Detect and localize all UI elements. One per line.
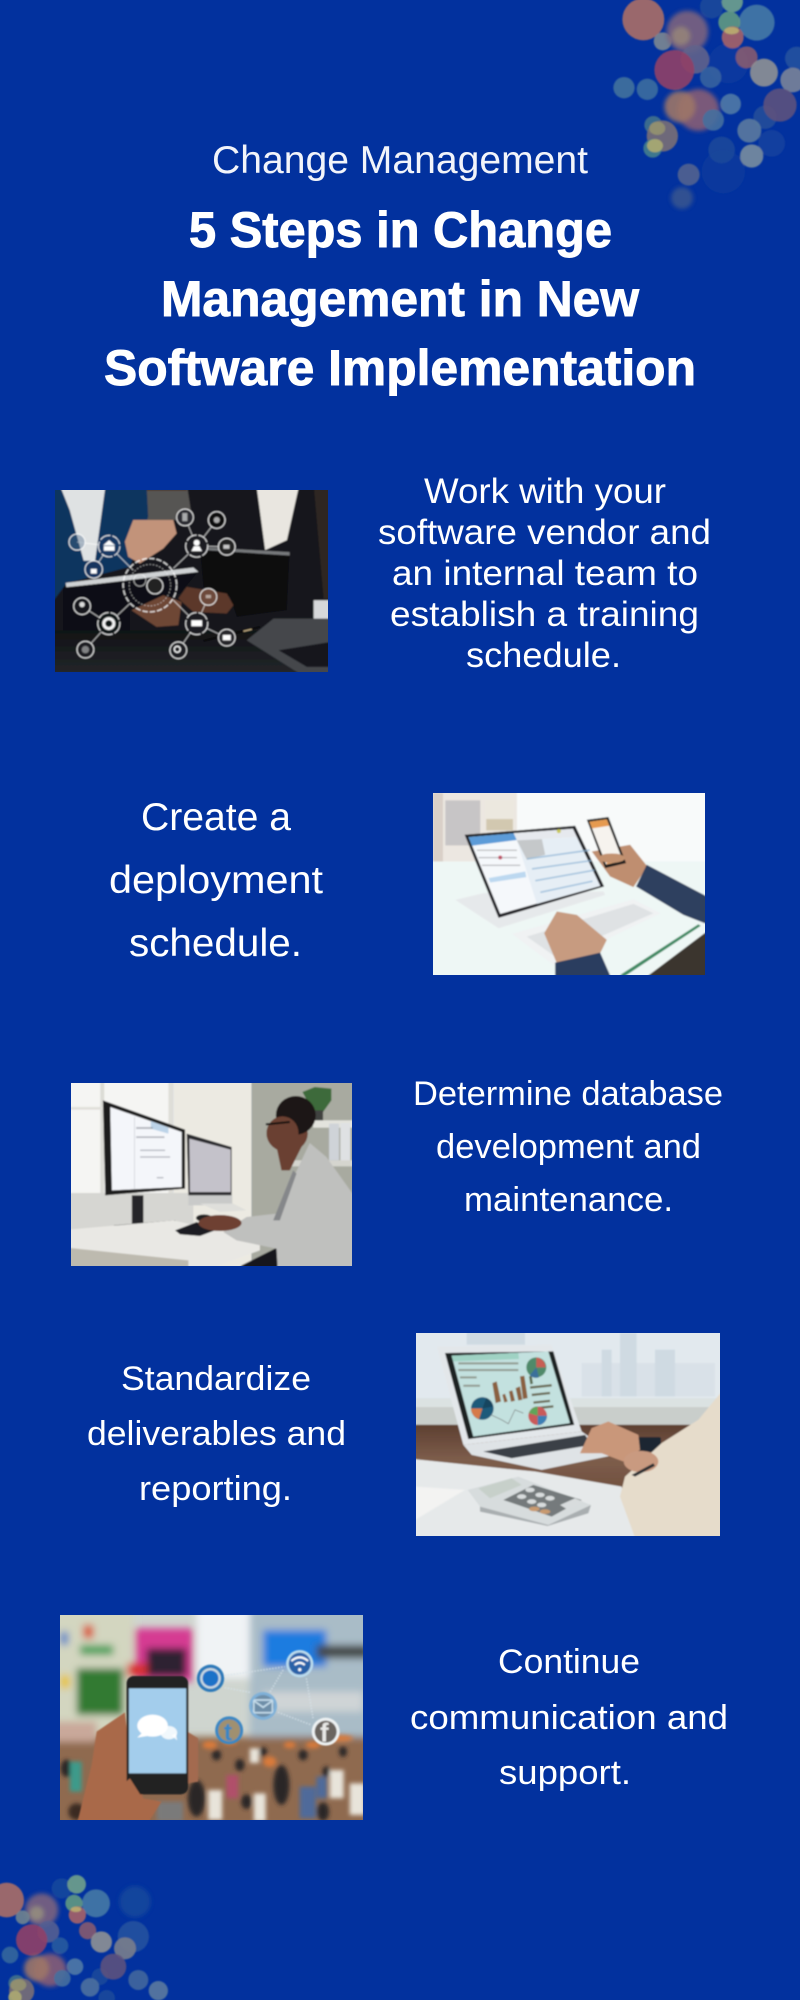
step 5 photo: smartphone with social icons over city crowd: f — [320, 1718, 329, 1748]
title: Software Implementation — [104, 340, 696, 396]
title — [104, 202, 696, 396]
step 2 text — [109, 796, 323, 965]
bokeh lights: top right — [613, 0, 800, 209]
step 1 text: Work with your — [424, 472, 666, 511]
step 3 text: Determine database — [413, 1075, 723, 1113]
step 2 photo: laptop calendar and phone — [433, 793, 705, 975]
step 4 text — [87, 1360, 346, 1508]
step 5 photo: smartphone with social icons over city crowd — [60, 1615, 363, 1820]
step 3 text — [413, 1075, 723, 1219]
step 5 text: support. — [499, 1754, 631, 1792]
step 2 text: schedule. — [129, 922, 302, 965]
step 5 photo: smartphone with social icons over city crowd: t — [224, 1718, 233, 1746]
step 4 text: reporting. — [139, 1470, 292, 1508]
step 1 text: schedule. — [466, 636, 621, 675]
title: Management in New — [161, 271, 639, 327]
step 2 text: deployment — [109, 859, 323, 902]
subtitle: Change Management — [212, 139, 588, 182]
step 5 text: Continue — [498, 1643, 640, 1681]
bokeh lights: bottom left — [0, 1875, 168, 2000]
step 4 text: deliverables and — [87, 1415, 346, 1453]
step 1 text: software vendor and — [378, 513, 711, 552]
step 4 text: Standardize — [121, 1360, 311, 1398]
step 3 photo: woman at dual monitors — [71, 1083, 352, 1266]
step 5 text: communication and — [410, 1699, 728, 1737]
step 3 text: maintenance. — [464, 1181, 673, 1219]
step 2 text: Create a — [141, 796, 291, 839]
step 1 text: establish a training — [390, 595, 699, 634]
step 5 text — [410, 1643, 728, 1792]
title: 5 Steps in Change — [189, 202, 612, 258]
step 1 photo: business team with tech icons — [55, 490, 328, 672]
step 4 photo: laptop charts and calculator — [416, 1333, 720, 1536]
step 3 text: development and — [436, 1128, 701, 1166]
step 1 text: an internal team to — [392, 554, 698, 593]
step 1 text — [378, 472, 711, 675]
